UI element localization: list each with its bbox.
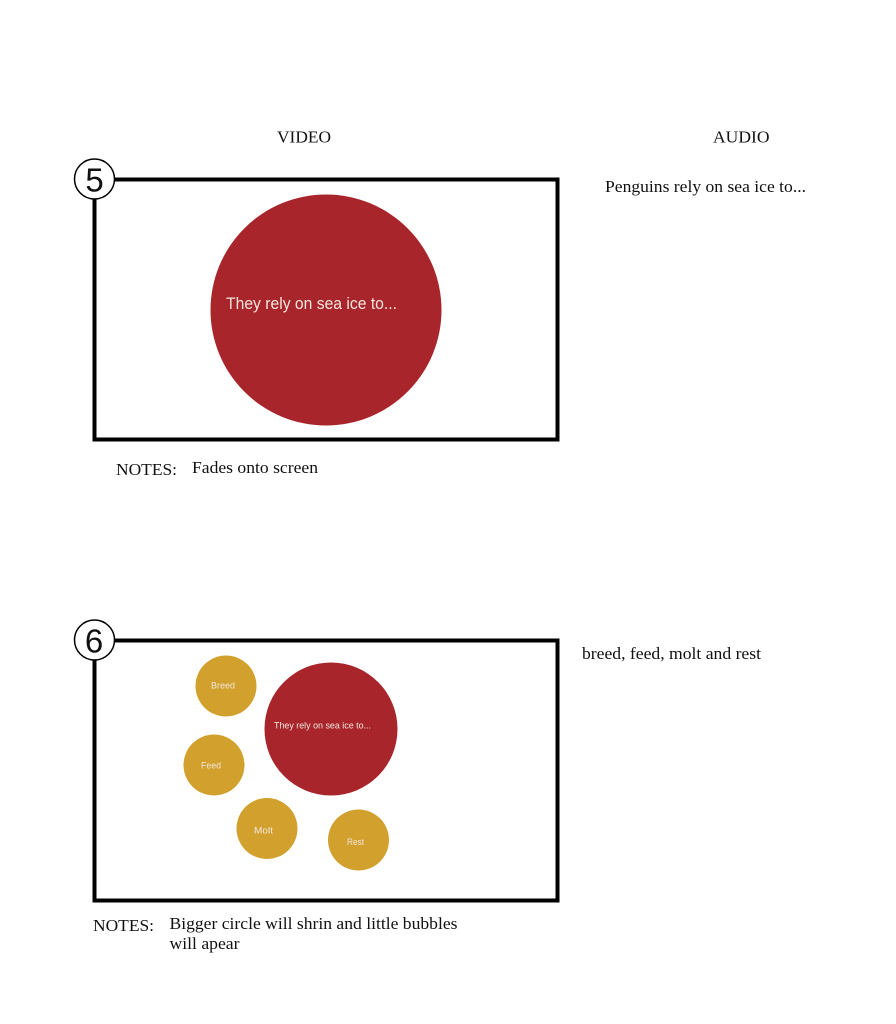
bubble: breed: Breed — [211, 680, 235, 692]
notes 5: Fades onto screen — [192, 458, 319, 477]
main red circle: They rely on sea ice to... — [226, 295, 397, 313]
video frame 6 — [94, 640, 558, 900]
shrunken red circle: They rely on sea ice to... — [274, 720, 371, 732]
notes 6: Bigger circle will shrin and little bubbles — [170, 914, 458, 933]
bubble: molt — [236, 798, 298, 859]
number badge 5: 5 — [85, 162, 104, 198]
audio text 5: Penguins rely on sea ice to... — [605, 177, 806, 196]
bubble: rest: Rest — [347, 837, 364, 848]
number badge 6: 6 — [85, 622, 103, 660]
notes 6: will apear — [170, 934, 240, 953]
audio text 6: breed, feed, molt and rest — [582, 644, 761, 663]
notes 6: NOTES: — [93, 916, 154, 935]
bubble: feed: Feed — [201, 760, 221, 772]
bubble: molt: Molt — [254, 826, 273, 836]
shrunken red circle — [264, 662, 398, 796]
notes 6 — [93, 914, 458, 953]
main red circle — [210, 194, 442, 426]
panel: frame 5 — [74, 159, 558, 440]
heading: audio: AUDIO — [713, 128, 770, 146]
number badge 6 — [74, 620, 114, 660]
number badge 5 — [74, 159, 114, 199]
bubble: breed — [196, 656, 256, 716]
heading: video: VIDEO — [277, 128, 331, 146]
video frame 5 — [94, 180, 558, 440]
notes 5 — [116, 458, 319, 479]
notes 5: NOTES: — [116, 460, 177, 479]
bubble: feed — [184, 734, 244, 796]
panel: frame 6 — [74, 620, 558, 900]
bubble: rest — [328, 810, 389, 870]
